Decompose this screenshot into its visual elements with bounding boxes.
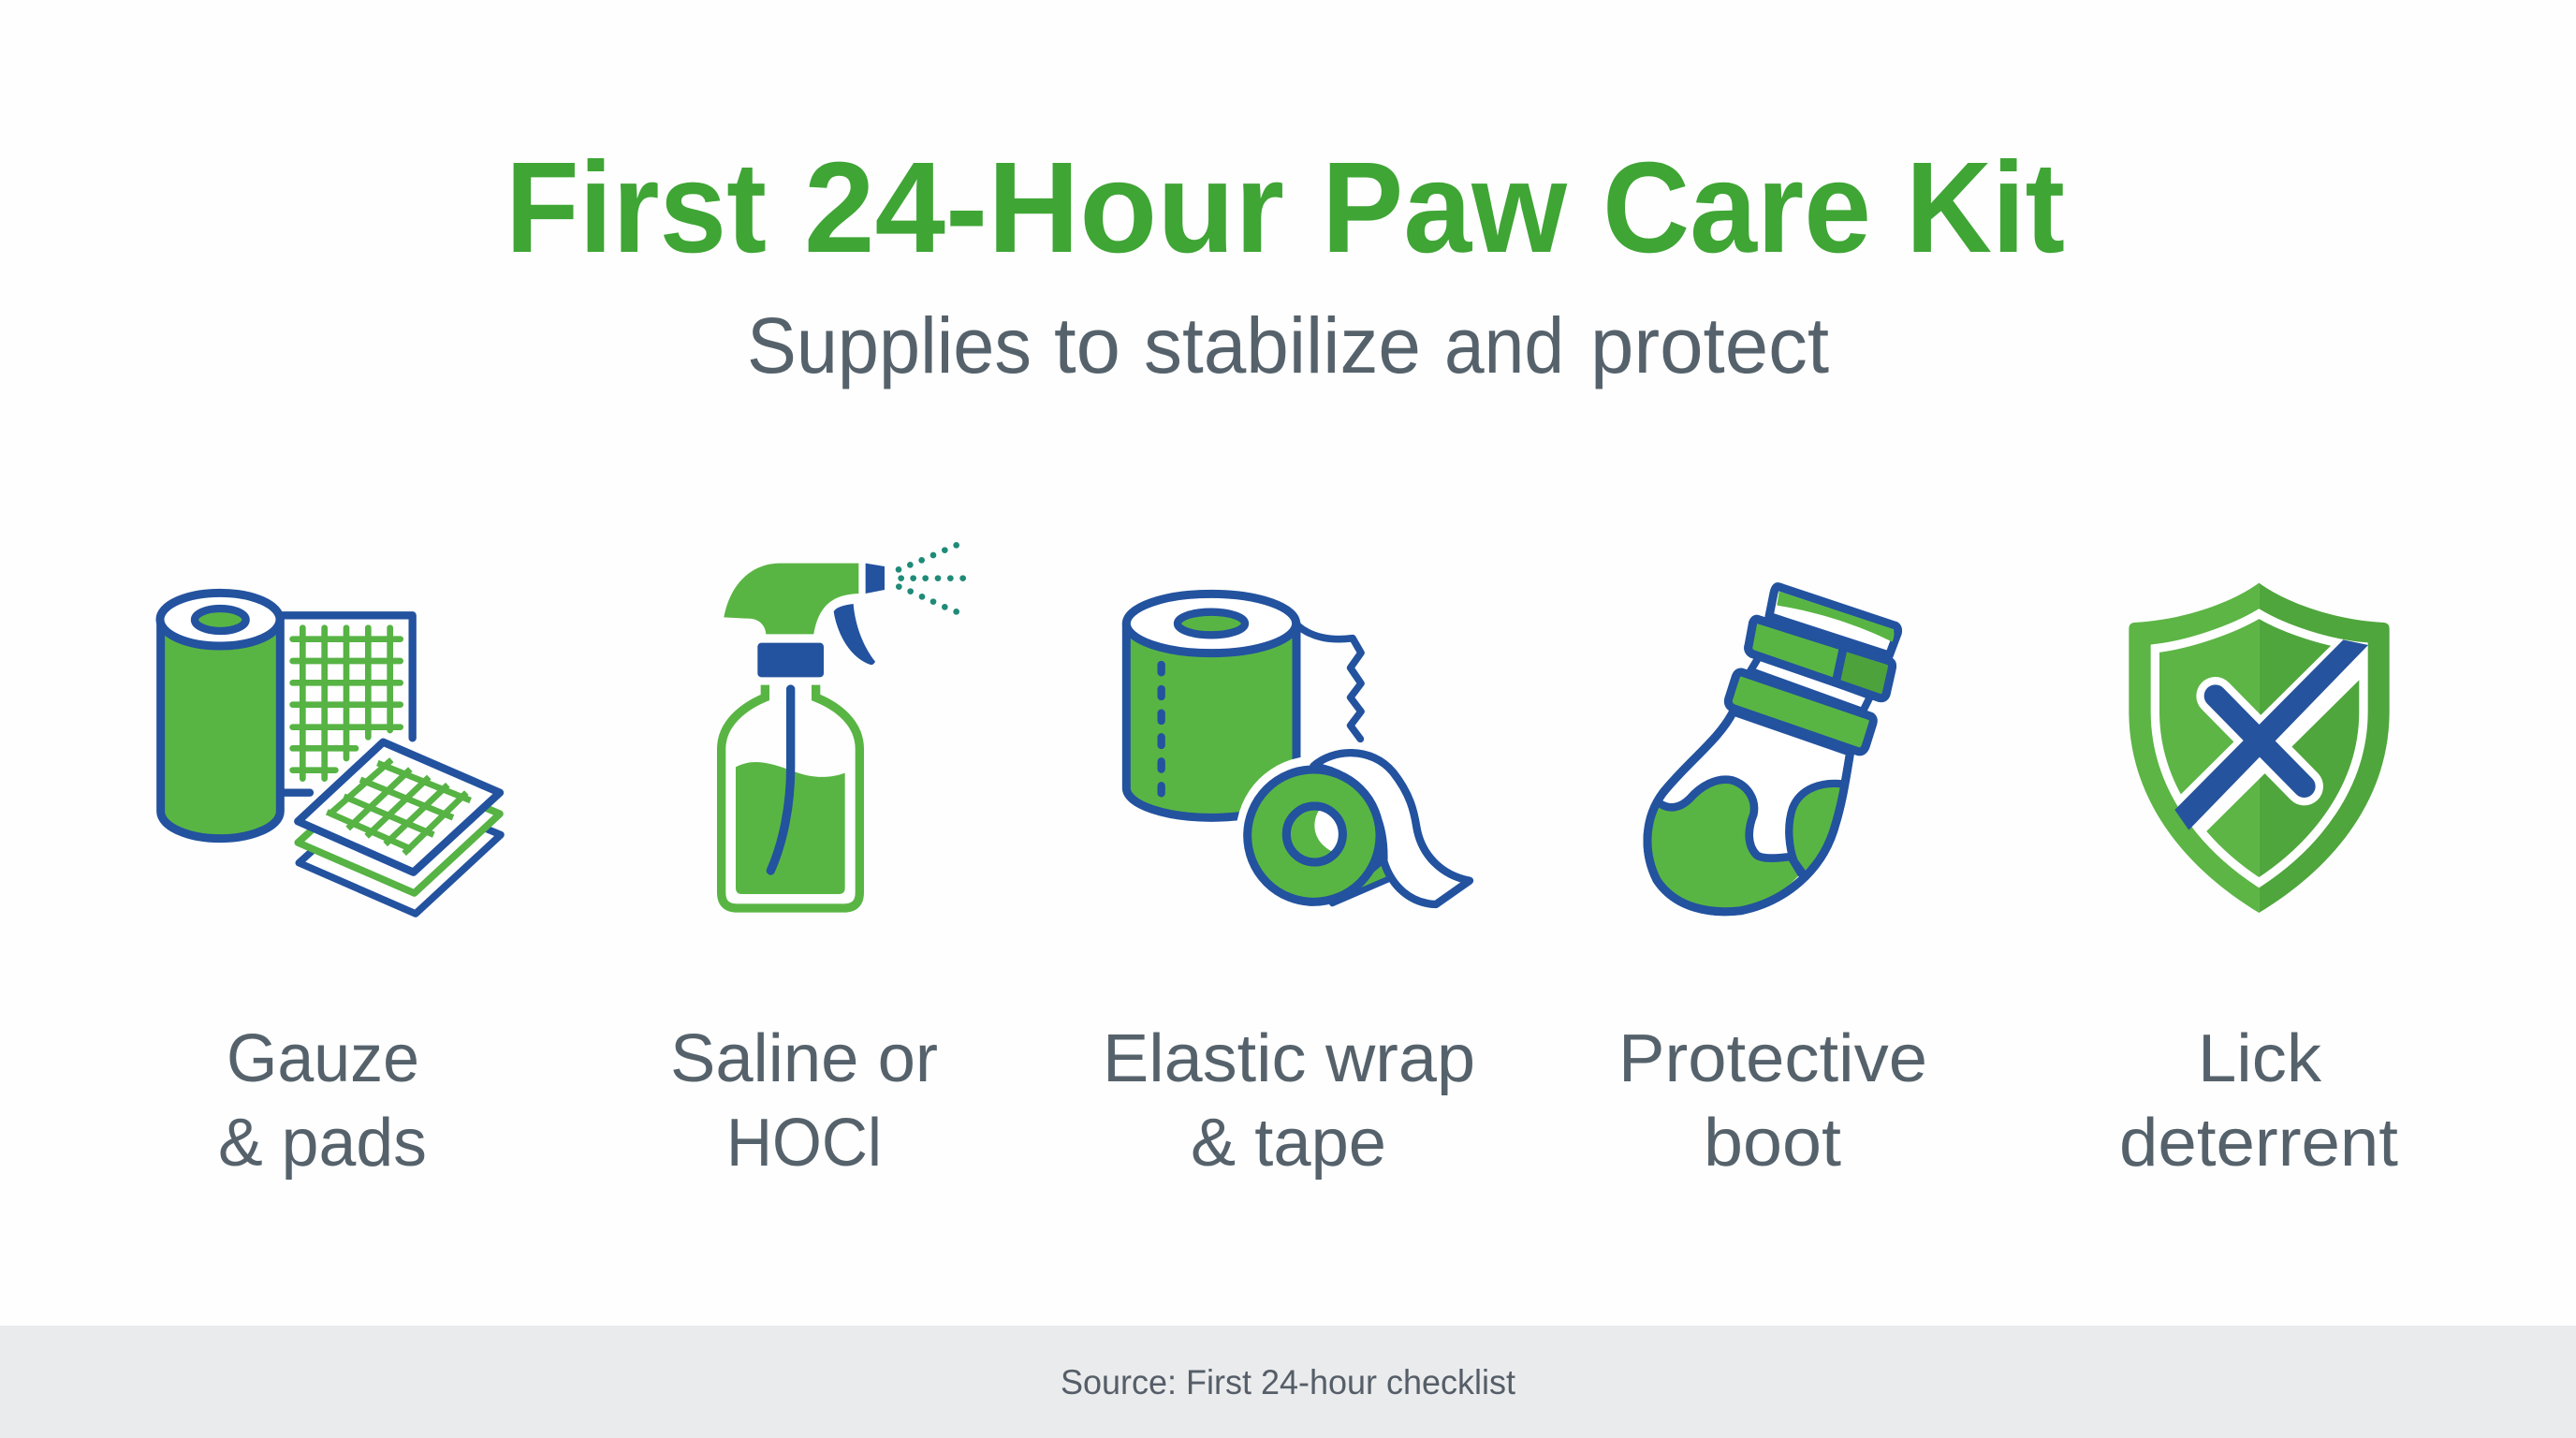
subtitle: and [1444,301,1564,389]
title [505,136,2065,280]
title: First [505,136,767,280]
icon: spray bottle [722,542,966,908]
icon: protective boot [1647,587,1898,912]
subtitle [747,301,1829,389]
title: Care [1603,136,1871,280]
subtitle: to [1054,301,1120,389]
label: protective boot [1618,1021,1927,1181]
title: Kit [1906,136,2065,280]
subtitle: Supplies [747,301,1032,389]
title: Paw [1322,136,1568,280]
label: elastic wrap and tape [1103,1021,1475,1181]
label: saline or HOCl: HOCl [726,1106,882,1181]
label: lick deterrent: deterrent [2119,1106,2398,1181]
label: protective boot: Protective [1618,1021,1927,1096]
subtitle: stabilize [1144,301,1421,389]
source note: Source: First 24-hour checklist [1061,1363,1516,1401]
label: gauze and pads: Gauze [227,1021,419,1096]
label: elastic wrap and tape: Elastic wrap [1103,1021,1475,1096]
icon: elastic wrap and tape [1126,594,1470,914]
label: saline or HOCl: Saline or [670,1021,938,1096]
label: elastic wrap and tape: & tape [1191,1106,1386,1181]
label: lick deterrent [2119,1021,2398,1181]
label: gauze and pads: & pads [218,1106,427,1181]
footer bar [0,1326,2576,1438]
label: protective boot: boot [1704,1106,1841,1181]
subtitle: protect [1590,301,1829,389]
title: 24-Hour [804,136,1284,280]
label: saline or HOCl [670,1021,938,1181]
label: gauze and pads [218,1021,427,1181]
icon: lick deterrent shield [2129,583,2390,913]
icon: gauze roll and pads [160,593,501,914]
label: lick deterrent: Lick [2198,1021,2322,1096]
